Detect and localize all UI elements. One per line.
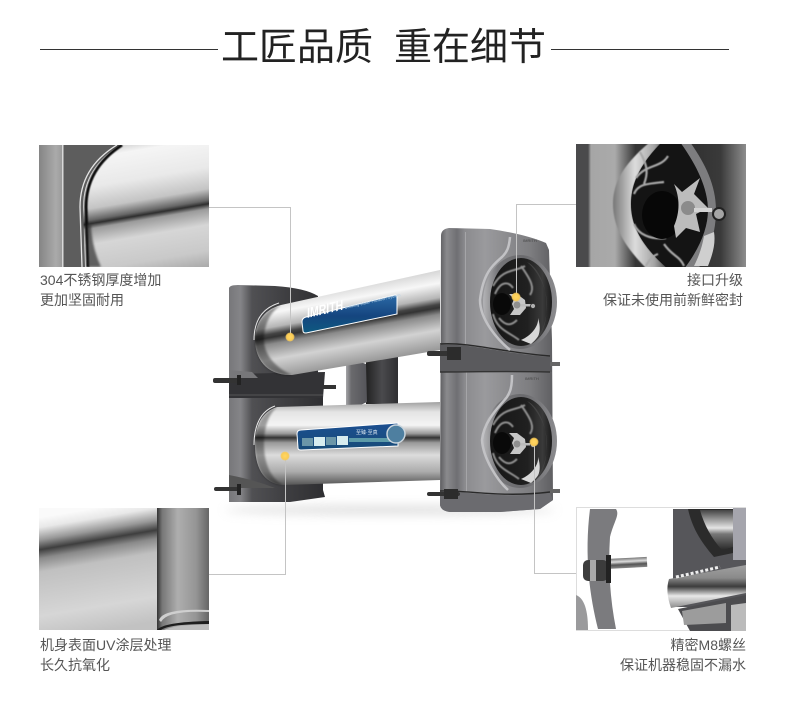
middle connector [346, 355, 398, 412]
connector: top left [209, 208, 290, 337]
right housing [427, 228, 560, 512]
upper tube [254, 270, 440, 375]
title [221, 27, 546, 69]
caption: UV coated surface [40, 637, 171, 673]
connector: top right [516, 204, 576, 297]
caption: inlet cap [603, 272, 743, 308]
upper fan [483, 255, 557, 349]
caption: stainless tube: 304不锈钢厚度增加 [40, 272, 161, 288]
caption: UV coated surface: 长久抗氧化 [40, 657, 110, 673]
lower fan [483, 394, 557, 488]
detail photo: M8 screw [576, 507, 746, 631]
caption: UV coated surface: 机身表面UV涂层处理 [40, 637, 171, 653]
lower tube label [297, 423, 405, 450]
right housing: IMRITH [523, 238, 537, 243]
hotspot: upper fan [512, 292, 520, 302]
caption: inlet cap: 接口升级 [687, 272, 743, 288]
caption: stainless tube [40, 272, 161, 308]
caption: inlet cap: 保证未使用前新鲜密封 [603, 292, 743, 308]
lower tube label: 至臻·至真 [356, 429, 378, 436]
lower tube [254, 402, 440, 485]
title rule left [40, 49, 218, 50]
hotspot: lower tube [280, 452, 290, 460]
title: 工匠品质 [221, 27, 373, 69]
caption: M8 screw: 精密M8螺丝 [671, 637, 746, 653]
caption: M8 screw [620, 637, 746, 673]
upper tube label: Drinking Water Filtration System [344, 292, 402, 310]
caption: M8 screw: 保证机器稳固不漏水 [620, 657, 746, 673]
title rule right [551, 49, 729, 50]
detail photo: UV coated surface [39, 508, 209, 630]
product: water filtration system [213, 228, 560, 512]
left bracket [213, 285, 336, 502]
connector: bottom left [209, 456, 286, 574]
title: 重在细节 [394, 27, 546, 69]
hotspot: upper tube [286, 332, 294, 342]
detail photo: stainless tube [39, 145, 209, 267]
right housing: IMRITH [525, 376, 539, 381]
upper tube label [302, 292, 402, 333]
product shadow [225, 505, 555, 515]
hotspot: lower fan [530, 438, 538, 446]
upper tube label: IMRITH [307, 297, 343, 322]
caption: stainless tube: 更加坚固耐用 [40, 292, 124, 308]
housing contour curves [480, 237, 512, 490]
detail photo: inlet cap [576, 144, 746, 267]
connector: bottom right [534, 442, 576, 574]
